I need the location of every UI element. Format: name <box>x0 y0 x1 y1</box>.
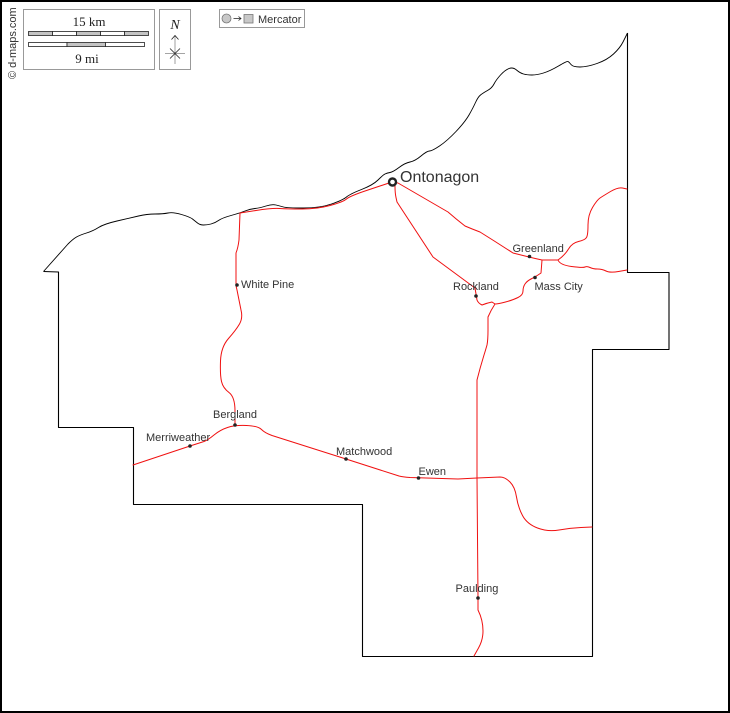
city: Mass City: Mass City <box>534 281 583 293</box>
north arrow panel <box>160 10 190 70</box>
city: Greenland: Greenland <box>512 243 564 255</box>
city: Rockland: Rockland <box>453 281 499 293</box>
projection icon <box>222 14 253 23</box>
city: Bergland: Bergland <box>213 409 257 421</box>
scale label km: 15 km <box>73 14 105 29</box>
scale label miles: 9 mi <box>75 51 99 66</box>
km bar <box>28 32 148 36</box>
mile bar <box>28 42 144 46</box>
city: White Pine: White Pine <box>241 279 294 291</box>
copyright: © d-maps.com <box>7 7 19 79</box>
city: Merriweather: Merriweather <box>146 432 211 444</box>
city: Ewen: Ewen <box>418 466 446 478</box>
compass icon <box>165 36 185 64</box>
city: Matchwood: Matchwood <box>336 446 392 458</box>
north label: N <box>169 18 180 33</box>
road network <box>133 182 627 656</box>
scale bar panel <box>24 10 154 70</box>
city marker: Ontonagon: Ontonagon <box>400 169 479 186</box>
projection badge <box>220 10 304 28</box>
city: Paulding: Paulding <box>456 583 498 595</box>
projection label: Mercator <box>258 14 302 26</box>
city: Bergland <box>213 409 257 427</box>
county outline and coastline <box>44 33 669 656</box>
city: Mass City <box>533 276 583 293</box>
